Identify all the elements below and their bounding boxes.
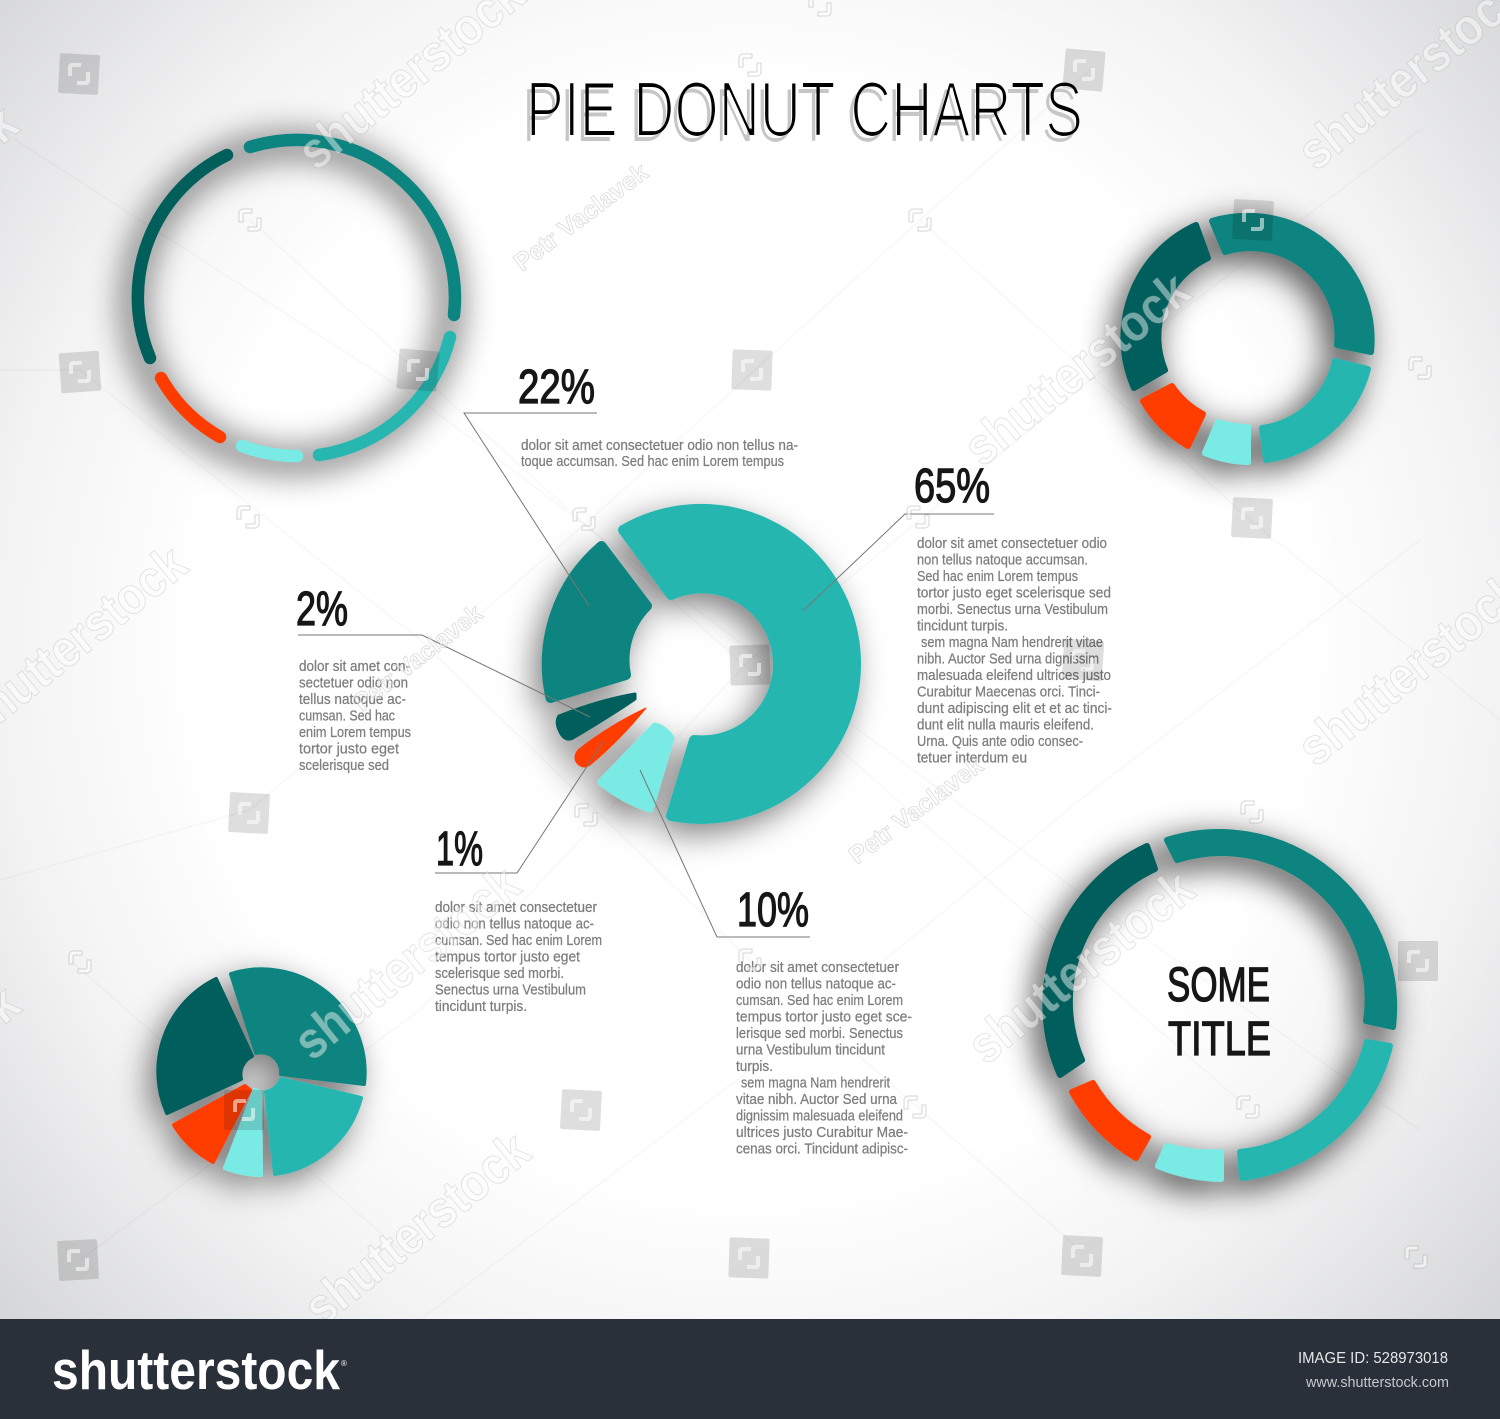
ring segment: aqua xyxy=(242,446,297,456)
description: malesuada eleifend ultrices justo xyxy=(917,668,1111,684)
pie segment: teal xyxy=(231,969,365,1084)
description: cumsan. Sed hac enim Lorem xyxy=(736,993,903,1009)
description: urna Vestibulum tincidunt xyxy=(736,1042,885,1058)
pie segment: aqua xyxy=(225,1090,261,1175)
description: toque accumsan. Sed hac enim Lorem tempus xyxy=(521,454,784,470)
chart: ring bottom right xyxy=(1045,832,1394,1179)
1% segment xyxy=(575,708,646,767)
description: enim Lorem tempus xyxy=(299,725,411,741)
description: non tellus natoque accumsan. xyxy=(917,552,1088,568)
leader line xyxy=(640,770,810,937)
description: Urna. Quis ante odio consec- xyxy=(917,734,1083,750)
value: 1% xyxy=(436,823,483,876)
description: tortor justo eget xyxy=(299,742,399,758)
10% segment xyxy=(601,726,671,809)
22% segment xyxy=(547,546,647,698)
pie segment: light teal xyxy=(266,1079,361,1174)
watermark text: shutterstock xyxy=(283,855,531,1071)
watermark text: shutterstock xyxy=(957,859,1205,1075)
ring segment: orange xyxy=(1072,1083,1148,1158)
title text: PIE DONUT CHARTS xyxy=(526,65,1083,153)
ring title: TITLE xyxy=(1168,1013,1271,1066)
description: cumsan. Sed hac xyxy=(299,708,395,724)
description: tempus tortor justo eget sce- xyxy=(736,1010,912,1026)
description: dolor sit amet consectetuer odio non tellus na- xyxy=(521,438,798,454)
callout: 65% xyxy=(803,460,1112,766)
description: Curabitur Maecenas orci. Tinci- xyxy=(917,684,1100,700)
ring segment: aqua xyxy=(1158,1146,1221,1179)
description: tincidunt turpis. xyxy=(435,999,527,1015)
description: Sed hac enim Lorem tempus xyxy=(917,569,1078,585)
description: dolor sit amet consectetuer xyxy=(435,900,597,916)
donut segment: aqua xyxy=(1205,422,1248,462)
leader line xyxy=(464,413,597,606)
description xyxy=(736,960,912,1158)
title xyxy=(522,65,1083,159)
description: Senectus urna Vestibulum xyxy=(435,982,586,998)
registered mark: ® xyxy=(341,1359,347,1368)
2% segment xyxy=(557,694,635,739)
description: turpis. xyxy=(736,1059,773,1075)
callout: 10% xyxy=(640,770,912,1158)
description: vitae nibh. Auctor Sed urna xyxy=(736,1092,898,1108)
description xyxy=(521,438,798,470)
description: scelerisque sed morbi. xyxy=(435,966,564,982)
description: nibh. Auctor Sed urna dignissim xyxy=(917,652,1099,668)
ring segment: light teal xyxy=(319,337,450,455)
watermark text: shutterstock xyxy=(953,261,1201,477)
value: 10% xyxy=(737,884,809,937)
description: sem magna Nam hendrerit vitae xyxy=(921,635,1103,651)
description: tetuer interdum eu xyxy=(917,750,1027,766)
footer bar xyxy=(0,1319,1500,1419)
chart: pie bottom left xyxy=(158,969,365,1175)
description: dolor sit amet consectetuer odio xyxy=(917,536,1107,552)
description: sem magna Nam hendrerit xyxy=(741,1076,890,1092)
description: lerisque sed morbi. Senectus xyxy=(736,1026,903,1042)
ring title xyxy=(1167,959,1271,1066)
ring segment: teal xyxy=(1167,832,1394,1027)
website: www.shutterstock.com xyxy=(1305,1374,1449,1391)
description: cumsan. Sed hac enim Lorem xyxy=(435,933,602,949)
ring segment: light teal xyxy=(1240,1042,1390,1178)
footer logo: shutterstock xyxy=(52,1339,340,1401)
description xyxy=(435,900,602,1015)
donut segment: teal xyxy=(1212,216,1372,352)
description: tortor justo eget scelerisque sed xyxy=(917,586,1111,602)
ring title: SOME xyxy=(1167,959,1270,1012)
watermark text: Petr Vaclavek xyxy=(844,751,988,870)
description: dignissim malesuada eleifend xyxy=(736,1108,903,1124)
donut segment: orange xyxy=(1143,386,1203,446)
description: dolor sit amet consectetuer xyxy=(736,960,899,976)
description: tincidunt turpis. xyxy=(917,618,1008,634)
watermark tiles xyxy=(57,48,1438,1281)
callout: 2% xyxy=(296,583,590,774)
ring segment: darkest xyxy=(138,155,227,358)
callout: 1% xyxy=(435,742,603,1015)
ring segment: orange xyxy=(161,378,220,437)
watermark text: Petr Vaclavek xyxy=(348,599,488,717)
chart: donut top right xyxy=(1123,216,1372,462)
description: dunt adipiscing elit et et ac tinci- xyxy=(917,701,1112,717)
leader line xyxy=(298,635,590,717)
description: ultrices justo Curabitur Mae- xyxy=(736,1125,908,1141)
donut segment: light teal xyxy=(1262,361,1368,460)
watermark text: Petr Vaclavek xyxy=(509,158,653,277)
description: odio non tellus natoque ac- xyxy=(736,976,896,992)
donut segment: darkest xyxy=(1123,225,1208,388)
value: 22% xyxy=(518,361,595,414)
ring segment: teal xyxy=(250,140,455,315)
description: tellus natoque ac- xyxy=(299,692,406,708)
description: cenas orci. Tincidunt adipisc- xyxy=(736,1142,908,1158)
description: scelerisque sed xyxy=(299,758,389,774)
value: 2% xyxy=(296,583,348,636)
description: dunt elit nulla mauris eleifend. xyxy=(917,718,1094,734)
description: tempus tortor justo eget xyxy=(435,950,580,966)
leader line xyxy=(435,742,603,873)
chart: main donut xyxy=(547,509,856,819)
65% segment xyxy=(623,509,856,819)
chart: thin ring top left xyxy=(134,140,455,461)
description: odio non tellus natoque ac- xyxy=(435,916,594,932)
description xyxy=(299,659,411,774)
value: 65% xyxy=(914,460,990,513)
description: dolor sit amet con- xyxy=(299,659,410,675)
description: morbi. Senectus urna Vestibulum xyxy=(917,602,1108,618)
watermark text: shutterstock xyxy=(293,1121,541,1337)
pie segment: orange xyxy=(174,1086,250,1162)
ring segment: darkest xyxy=(1045,846,1155,1075)
description xyxy=(917,536,1112,766)
title shadow: PIE DONUT CHARTS xyxy=(522,71,1078,159)
pie segment: darkest xyxy=(158,979,252,1113)
description: sectetuer odio non xyxy=(299,676,408,692)
leader line xyxy=(803,514,994,611)
image id: IMAGE ID: 528973018 xyxy=(1298,1350,1448,1367)
callout: 22% xyxy=(464,361,798,606)
